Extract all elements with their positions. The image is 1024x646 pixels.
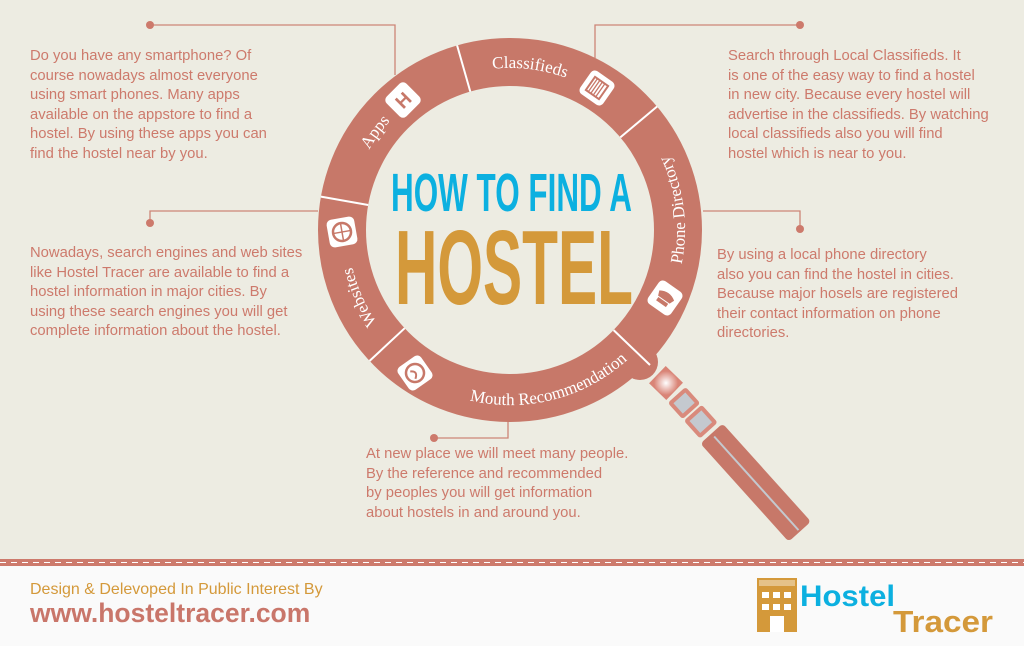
text: apps bbox=[30, 48, 267, 162]
text: classifieds: local classifieds also you will find bbox=[728, 126, 943, 142]
text: apps: course nowadays almost everyone bbox=[30, 68, 258, 84]
ring: Classifieds bbox=[492, 56, 568, 78]
text: websites: complete information about the hostel. bbox=[30, 323, 281, 339]
icon: websites bbox=[326, 216, 358, 248]
text: phone directory: Because major hosels are registered bbox=[717, 286, 958, 302]
text: apps: hostel. By using these apps you can bbox=[30, 126, 267, 142]
text: phone directory: their contact information on phone bbox=[717, 306, 941, 322]
icon: mouth bbox=[396, 354, 434, 392]
footer credit bbox=[30, 581, 323, 628]
text: mouth recommendation: by peoples you will get information bbox=[366, 485, 592, 501]
magnifier handle bbox=[646, 363, 811, 542]
logo: Tracer bbox=[893, 604, 993, 639]
text: classifieds: Search through Local Classifieds. It bbox=[728, 48, 961, 64]
text: websites: hostel information in major cities. By bbox=[30, 284, 267, 300]
text: phone directory: By using a local phone directory bbox=[717, 247, 927, 263]
text: websites bbox=[30, 245, 302, 339]
footer credit: Design & Delevoped In Public Interest By bbox=[30, 581, 323, 598]
logo: Hostel bbox=[800, 580, 895, 613]
text: apps: using smart phones. Many apps bbox=[30, 87, 240, 103]
logo bbox=[757, 578, 993, 639]
text: websites: using these search engines you will get bbox=[30, 304, 287, 320]
text: mouth recommendation bbox=[366, 446, 628, 520]
text: apps: find the hostel near by you. bbox=[30, 146, 208, 162]
text: websites: like Hostel Tracer are available to find a bbox=[30, 264, 289, 280]
icon: classifieds bbox=[578, 69, 616, 107]
footer bbox=[0, 559, 1024, 646]
text: classifieds bbox=[728, 48, 989, 162]
icon: apps bbox=[383, 80, 423, 120]
text: classifieds: is one of the easy way to find a hostel bbox=[728, 68, 975, 84]
text: apps: Do you have any smartphone? Of bbox=[30, 48, 251, 64]
ring bbox=[318, 38, 702, 422]
text: phone directory: directories. bbox=[717, 325, 789, 341]
icon: phone bbox=[646, 279, 684, 317]
ring: Mouth Recommendation bbox=[470, 355, 628, 406]
text: websites: Nowadays, search engines and web sites bbox=[30, 245, 302, 261]
text: mouth recommendation: At new place we will meet many people. bbox=[366, 446, 628, 462]
text: mouth recommendation: about hostels in and around you. bbox=[366, 504, 581, 520]
connector lines bbox=[150, 25, 800, 438]
ring: Phone Directory bbox=[661, 158, 686, 264]
title bbox=[391, 163, 633, 327]
ring: Websites bbox=[345, 268, 374, 328]
text: classifieds: hostel which is near to you. bbox=[728, 146, 906, 162]
title: HOSTEL bbox=[395, 209, 633, 327]
text: phone directory bbox=[717, 247, 958, 341]
text: phone directory: also you can find the hostel in cities. bbox=[717, 266, 954, 282]
ring: Apps bbox=[362, 116, 389, 150]
text: mouth recommendation: By the reference and recommended bbox=[366, 466, 602, 482]
text: classifieds: advertise in the classifieds. By watching bbox=[728, 106, 989, 122]
text: classifieds: in new city. Because every hostel will bbox=[728, 87, 970, 103]
footer credit: www.hosteltracer.com bbox=[30, 598, 310, 628]
text: apps: available on the appstore to find a bbox=[30, 106, 252, 122]
title: HOW TO FIND A bbox=[391, 163, 632, 223]
icon: apps: H bbox=[392, 89, 416, 113]
